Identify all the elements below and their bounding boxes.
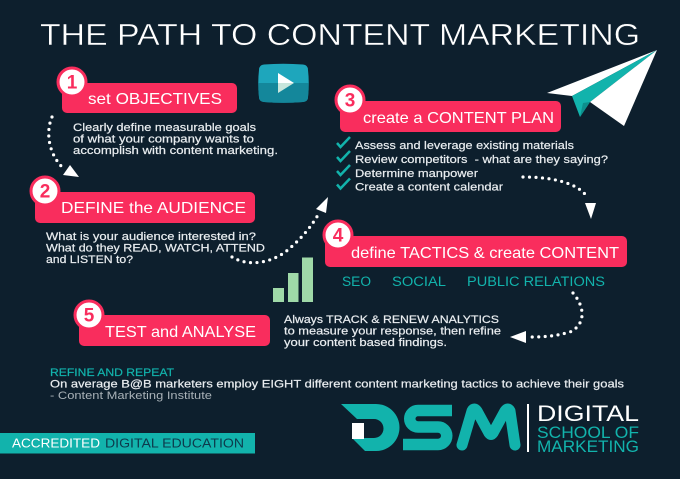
step 3 checklist: [337, 137, 608, 194]
step 1 heading: set OBJECTIVES: [88, 91, 222, 108]
icon: video play button: [258, 64, 309, 103]
step 2 description: What do they READ, WATCH, ATTEND: [46, 242, 265, 254]
refine and repeat note: On average B@B marketers employ EIGHT different content marketing tactics to achieve their goals: [50, 378, 625, 390]
DSM logo: [341, 401, 639, 456]
step 4 heading pill: [325, 236, 627, 267]
step 3 number badge: [336, 86, 364, 114]
step 2 description: [46, 231, 265, 266]
step 4: define tactics and create content: [324, 221, 627, 289]
step 1 number badge: 1: [67, 72, 78, 94]
icon: check marks: [337, 137, 350, 188]
step 5 description: to measure your response, then refine: [284, 326, 501, 338]
icon: bar chart: [273, 258, 313, 302]
arrow: step 3 to step 4: [523, 177, 596, 219]
step 1 description: Clearly define measurable goals: [73, 122, 257, 134]
step 4 tactics: [342, 274, 605, 289]
step 1 description: of what your company wants to: [73, 134, 254, 146]
logo wordmark: MARKETING: [537, 437, 639, 456]
step 4 tactics: SEO: [342, 274, 371, 289]
step 4 number badge: 4: [333, 226, 344, 246]
checklist items: Create a content calendar: [355, 182, 503, 194]
logo wordmark: [537, 401, 639, 456]
arrow: step 4 to step 5: [510, 293, 582, 343]
step 1: set objectives: [58, 68, 278, 157]
step 5: test and analyse: [75, 301, 501, 349]
logo letter S: [403, 410, 452, 444]
step 2 number badge: 2: [40, 182, 50, 202]
checklist items: Assess and leverage existing materials: [355, 140, 575, 152]
step 2 heading pill: [35, 192, 255, 223]
logo letter M: [462, 409, 515, 445]
step 5 heading: TEST and ANALYSE: [105, 324, 256, 341]
checklist items: [355, 140, 608, 194]
arrow: step 2 to step 3: [232, 197, 328, 263]
step 3 heading pill: [340, 101, 561, 132]
accredited banner: ACCREDITED: [12, 436, 100, 450]
step 5 heading pill: [79, 315, 270, 346]
accredited banner: [0, 433, 255, 454]
logo wordmark: DIGITAL: [537, 401, 639, 426]
title: THE PATH TO CONTENT MARKETING: [40, 18, 640, 52]
step 5 number badge: 5: [84, 306, 95, 326]
step 1 heading pill: [62, 83, 237, 113]
step 3: create a content plan: [0, 86, 639, 456]
step 5 description: [284, 314, 501, 349]
step 2 heading: DEFINE the AUDIENCE: [61, 200, 246, 217]
step 4 tactics: SOCIAL: [392, 274, 447, 289]
refine and repeat note: REFINE AND REPEAT: [50, 367, 174, 379]
step 4 heading: define TACTICS & create CONTENT: [351, 245, 619, 262]
step 3 heading: create a CONTENT PLAN: [363, 110, 554, 127]
step 2 description: What is your audience interested in?: [46, 231, 256, 243]
step 2: define the audience: [31, 177, 265, 266]
step 3 number badge: 3: [345, 90, 355, 112]
step 1 number badge: [58, 68, 86, 96]
logo separator: [527, 404, 529, 452]
step 4 tactics: PUBLIC RELATIONS: [467, 274, 605, 289]
step 2 number badge: [31, 177, 59, 205]
step 5 description: your content based findings.: [284, 337, 447, 349]
logo wordmark: SCHOOL OF: [537, 423, 639, 442]
arrow: step 1 to step 2: [49, 117, 79, 177]
step 5 number badge: [75, 301, 103, 329]
step 1 description: accomplish with content marketing.: [73, 145, 278, 157]
step 1 description: [73, 122, 278, 157]
checklist items: Review competitors - what are they saying?: [355, 154, 608, 166]
refine and repeat note: - Content Marketing Institute: [50, 390, 212, 402]
accredited banner: DIGITAL EDUCATION: [105, 436, 244, 450]
logo letter D: [341, 404, 400, 451]
checklist items: Determine manpower: [355, 168, 478, 180]
refine and repeat note: [50, 367, 625, 402]
step 5 description: Always TRACK & RENEW ANALYTICS: [284, 314, 499, 326]
step 2 description: and LISTEN to?: [46, 254, 133, 266]
icon: paper plane: [547, 50, 657, 126]
step 4 number badge: [324, 221, 352, 249]
